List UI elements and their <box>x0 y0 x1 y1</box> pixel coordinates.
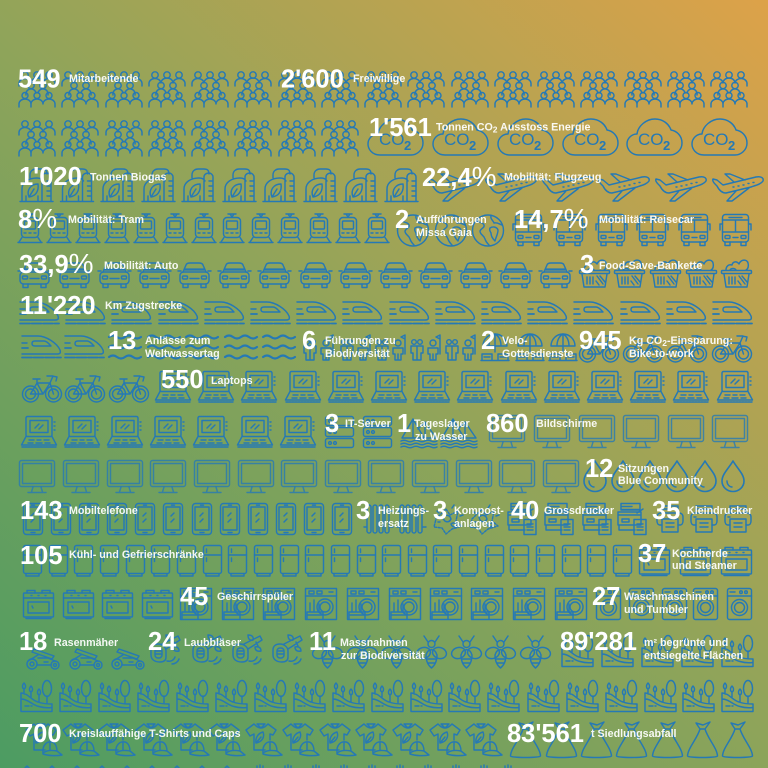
stat: 1 Tageslager zu Wasser: 1 <box>397 410 411 438</box>
icon row: T-shirts and caps <box>26 724 502 756</box>
stat: 24 Laubbläser: Laubbläser <box>184 637 241 649</box>
icon row: trains <box>20 302 752 358</box>
stat: 860 Bildschirme <box>486 410 597 438</box>
icon row: bicycles <box>22 336 752 402</box>
icon row: tents at water <box>401 419 477 448</box>
stat: 37 Kochherde und Steamer: und Steamer <box>672 560 737 572</box>
stat: 143 Mobiltelefone: Mobiltelefone <box>69 505 138 517</box>
icon row: church umbrellas <box>481 334 577 360</box>
stat: 8% Tram: 8% <box>18 203 57 234</box>
stat: 13 Anlässe zum Weltwassertag <box>108 327 220 360</box>
stat: 549 Mitarbeitende: Mitarbeitende <box>69 73 139 85</box>
icon row: trams <box>18 214 389 242</box>
stat: 143 Mobiltelefone <box>20 497 138 525</box>
stat: 11 Massnahmen zur Biodiversität <box>309 628 425 662</box>
icon row: large printers <box>508 504 646 534</box>
stat: 3 Heizungsersatz: ersatz <box>378 518 409 530</box>
stat: 12 Sitzungen Blue Community: Blue Community <box>618 475 703 487</box>
stat: 3 Kompostanlagen: Kompost- <box>454 505 504 517</box>
stat: 2 Aufführungen Missa Gaia: 2 <box>395 206 409 234</box>
stat: 11 Massnahmen zur Biodiversität: Massnahmen <box>340 637 408 649</box>
stat: 89'281 m² begrünte und entsiegelte Flächen: 89'281 <box>560 628 637 656</box>
stat: 14,7% Reisecar <box>514 203 694 234</box>
stat: 1'020 Tonnen Biogas: 1'020 <box>19 163 82 191</box>
stat: 1'561 Tonnen CO2: 1'561 <box>369 114 432 142</box>
stat: 11'220 Km Zugstrecke <box>20 292 182 320</box>
stat: 45 Geschirrspüler: Geschirrspüler <box>217 591 293 603</box>
stat: 945 Kg CO2-Einsparung: 945 <box>579 327 622 355</box>
stat: 550 Laptops: Laptops <box>211 375 253 387</box>
stat: 45 Geschirrspüler <box>180 583 293 611</box>
stat: 11'220 Km Zugstrecke: 11'220 <box>20 292 96 320</box>
stat: 2 Aufführungen Missa Gaia: Missa Gaia <box>416 227 473 239</box>
stat: 8% Tram: Mobilität: Tram <box>68 214 144 226</box>
stat: 33,9% Auto <box>19 248 179 279</box>
stat: 27 Waschmaschinen und Tumbler: und Tumbler <box>624 604 688 616</box>
stat: 89'281 m² begrünte und entsiegelte Flächen <box>560 628 743 662</box>
icon row: biogas plants <box>20 169 418 202</box>
icon row: globes <box>398 215 504 246</box>
stat: 2'600 Freiwillige: Freiwillige <box>353 73 405 85</box>
stat: 24 Laubbläser <box>148 628 241 656</box>
stat: 89'281 m² begrünte und entsiegelte Flächen: m² begrünte und <box>644 637 728 649</box>
stat: 3 Kompostanlagen <box>433 497 504 530</box>
stat: 14,7% Reisecar: 14,7% <box>514 203 589 234</box>
stat: 3 Kompostanlagen: anlagen <box>454 518 494 530</box>
stat: 105 Kühl- und Gefrierschränke <box>20 542 204 570</box>
stat: 1'020 Tonnen Biogas <box>19 163 166 191</box>
stat: 1'561 Tonnen CO2: Tonnen CO <box>436 122 493 134</box>
stat: 18 Rasenmäher: 18 <box>19 628 47 656</box>
stat: 12 Sitzungen Blue Community: Sitzungen <box>618 463 669 475</box>
stat: 860 Bildschirme: Bildschirme <box>536 418 597 430</box>
icon row: guided groups <box>304 335 475 360</box>
stat: 6 Führungen zu Biodiversität: Biodiversität <box>325 348 390 360</box>
stat: 6 Führungen zu Biodiversität: 6 <box>302 327 316 355</box>
stat: 27 Waschmaschinen und Tumbler: 27 <box>592 583 620 611</box>
stat: 945 Kg CO2-Einsparung: Bike-to-work <box>629 348 694 360</box>
stat: 22,4% Flugzeug: 22,4% <box>422 161 497 192</box>
icon row: dishwashers <box>180 588 586 620</box>
icon row: cars <box>18 263 572 288</box>
stat: 24 Laubbläser: 24 <box>148 628 177 656</box>
icon row: lawn mowers <box>27 649 144 669</box>
stat: 45 Geschirrspüler: 45 <box>180 583 208 611</box>
stat: 1'561 Tonnen CO2 <box>369 114 590 142</box>
stat: 945 Kg CO2-Einsparung: Kg CO <box>629 335 662 347</box>
stat: 22,4% Flugzeug <box>422 161 601 192</box>
stat: 550 Laptops: 550 <box>161 366 204 394</box>
stat: 13 Anlässe zum Weltwassertag: Anlässe zum <box>145 335 210 347</box>
stat: 8% Tram <box>18 203 144 234</box>
icon row: green landscapes <box>21 636 753 712</box>
stat: 1'561 Tonnen CO2: Ausstoss Energie <box>498 122 590 134</box>
stat: 40 Grossdrucker <box>511 497 614 525</box>
stat: 27 Waschmaschinen und Tumbler: Waschmaschinen <box>624 591 714 603</box>
stat: 3 IT-Server: 3 <box>325 410 339 438</box>
stat: 860 Bildschirme: 860 <box>486 410 529 438</box>
stat: 11 Massnahmen zur Biodiversität: zur Biodiversität <box>341 650 425 662</box>
stat: 105 Kühl- und Gefrierschränke: Kühl- und Gefrierschränke <box>69 549 204 561</box>
stat: 14,7% Reisecar: Mobilität: Reisecar <box>599 214 694 226</box>
stat: 13 Anlässe zum Weltwassertag: 13 <box>108 327 136 355</box>
stat: 2 Velo-Gottesdienste: Gottesdienste <box>502 348 573 360</box>
stat: 2 Velo-Gottesdienste: 2 <box>481 327 495 355</box>
stat: 550 Laptops <box>161 366 253 394</box>
stat: 2'600 Freiwillige <box>281 66 405 94</box>
icon row: washing machines <box>596 588 752 620</box>
stat: 1'561 Tonnen CO2: 2 <box>493 124 498 134</box>
icon row: water waves <box>109 336 295 358</box>
stat: 2 Aufführungen Missa Gaia <box>395 206 487 239</box>
icon row: Mitarbeitende and Freiwillige people <box>19 72 747 156</box>
icon row: compost <box>434 505 499 534</box>
stat: 549 Mitarbeitende <box>18 66 139 94</box>
stat: 2'600 Freiwillige: 2'600 <box>281 66 344 94</box>
stat: 35 Kleindrucker: Kleindrucker <box>687 505 752 517</box>
icon row: water drops <box>584 461 744 492</box>
stat: 3 IT-Server: IT-Server <box>345 418 391 430</box>
icon row: clipped tips at bottom edge <box>25 765 511 768</box>
stat: 1 Tageslager zu Wasser: Tageslager <box>414 418 470 430</box>
stat: 3 IT-Server <box>325 410 391 438</box>
stat: 3 Kompostanlagen: 3 <box>433 497 447 525</box>
stat: 2 Velo-Gottesdienste <box>481 327 573 360</box>
stat: 33,9% Auto: 33,9% <box>19 248 94 279</box>
icon row: waste bags <box>510 722 752 758</box>
icon row: IT servers <box>326 416 392 448</box>
stat: 18 Rasenmäher <box>19 628 118 656</box>
stat: 13 Anlässe zum Weltwassertag: Weltwassertag <box>145 348 220 360</box>
icon row: radiators <box>364 505 426 533</box>
stat: 33,9% Auto: Mobilität: Auto <box>104 260 179 272</box>
stat: 83'561 t Siedlungsabfall <box>507 720 677 748</box>
icon row: laptops <box>22 372 752 447</box>
stat: 1 Tageslager zu Wasser <box>397 410 470 443</box>
stat: 37 Kochherde und Steamer <box>638 540 737 572</box>
stat: 700 Kreislauffähige T-Shirts und Caps <box>19 720 241 748</box>
icon row: bees <box>311 636 552 668</box>
stat: 105 Kühl- und Gefrierschränke: 105 <box>20 542 63 570</box>
icon row: ovens <box>24 548 752 618</box>
icon row: airplanes <box>429 174 763 201</box>
stat: 700 Kreislauffähige T-Shirts und Caps: Kreislauffähige T-Shirts und Caps <box>69 728 241 740</box>
stat: 945 Kg CO2-Einsparung: 2 <box>662 338 667 348</box>
icon row: fridges <box>24 546 632 576</box>
stat: 945 Kg CO2-Einsparung <box>579 327 733 360</box>
stat: 1'020 Tonnen Biogas: Tonnen Biogas <box>90 172 166 184</box>
stat: 3 Food-Save-Bankette: 3 <box>580 251 594 279</box>
stat: 549 Mitarbeitende: 549 <box>18 66 61 94</box>
stat: 3 Heizungsersatz: Heizungs- <box>378 505 430 517</box>
stat: 37 Kochherde und Steamer: Kochherde <box>672 548 728 560</box>
stat: 89'281 m² begrünte und entsiegelte Flächen: entsiegelte Flächen <box>644 650 743 662</box>
icon row: leaf blowers <box>151 635 302 664</box>
stat: 3 Food-Save-Bankette: Food-Save-Bankette <box>599 260 702 272</box>
stat: 83'561 t Siedlungsabfall: 83'561 <box>507 720 584 748</box>
icon row: small printers <box>657 506 751 532</box>
stat: 83'561 t Siedlungsabfall: t Siedlungsabfall <box>591 728 677 740</box>
stat: 3 Food-Save-Bankette <box>580 251 702 279</box>
stat: 700 Kreislauffähige T-Shirts und Caps: 700 <box>19 720 62 748</box>
stat: 3 Heizungsersatz <box>356 497 430 530</box>
stat: 6 Führungen zu Biodiversität: Führungen zu <box>325 335 396 347</box>
stat: 6 Führungen zu Biodiversität <box>302 327 396 360</box>
stat: 35 Kleindrucker <box>652 497 752 525</box>
stat: 1 Tageslager zu Wasser: zu Wasser <box>415 431 467 443</box>
icon row: CO2 clouds <box>368 119 747 155</box>
stat: 2 Velo-Gottesdienste: Velo- <box>502 335 528 347</box>
icon row: coaches <box>513 214 751 246</box>
stat: 40 Grossdrucker: 40 <box>511 497 539 525</box>
stat: 143 Mobiltelefone: 143 <box>20 497 63 525</box>
stat: 37 Kochherde und Steamer: 37 <box>638 540 666 568</box>
icon row: mobile phones <box>24 504 352 534</box>
stat: 2 Aufführungen Missa Gaia: Aufführungen <box>416 214 487 226</box>
stat: 18 Rasenmäher: Rasenmäher <box>54 637 118 649</box>
stat: 12 Sitzungen Blue Community <box>585 455 703 487</box>
stat: 22,4% Flugzeug: Mobilität: Flugzeug <box>504 172 601 184</box>
stat: 40 Grossdrucker: Grossdrucker <box>544 505 614 517</box>
stat: 12 Sitzungen Blue Community: 12 <box>585 455 613 483</box>
stat: 11 Massnahmen zur Biodiversität: 11 <box>309 628 336 656</box>
stat: 11'220 Km Zugstrecke: Km Zugstrecke <box>105 300 182 312</box>
stat: 945 Kg CO2-Einsparung: -Einsparung: <box>667 335 733 347</box>
stat: 27 Waschmaschinen und Tumbler <box>592 583 714 616</box>
icon row: monitors <box>20 416 748 492</box>
icon row: food baskets <box>580 260 752 287</box>
stat: 35 Kleindrucker: 35 <box>652 497 680 525</box>
stat: 3 Heizungsersatz: 3 <box>356 497 370 525</box>
